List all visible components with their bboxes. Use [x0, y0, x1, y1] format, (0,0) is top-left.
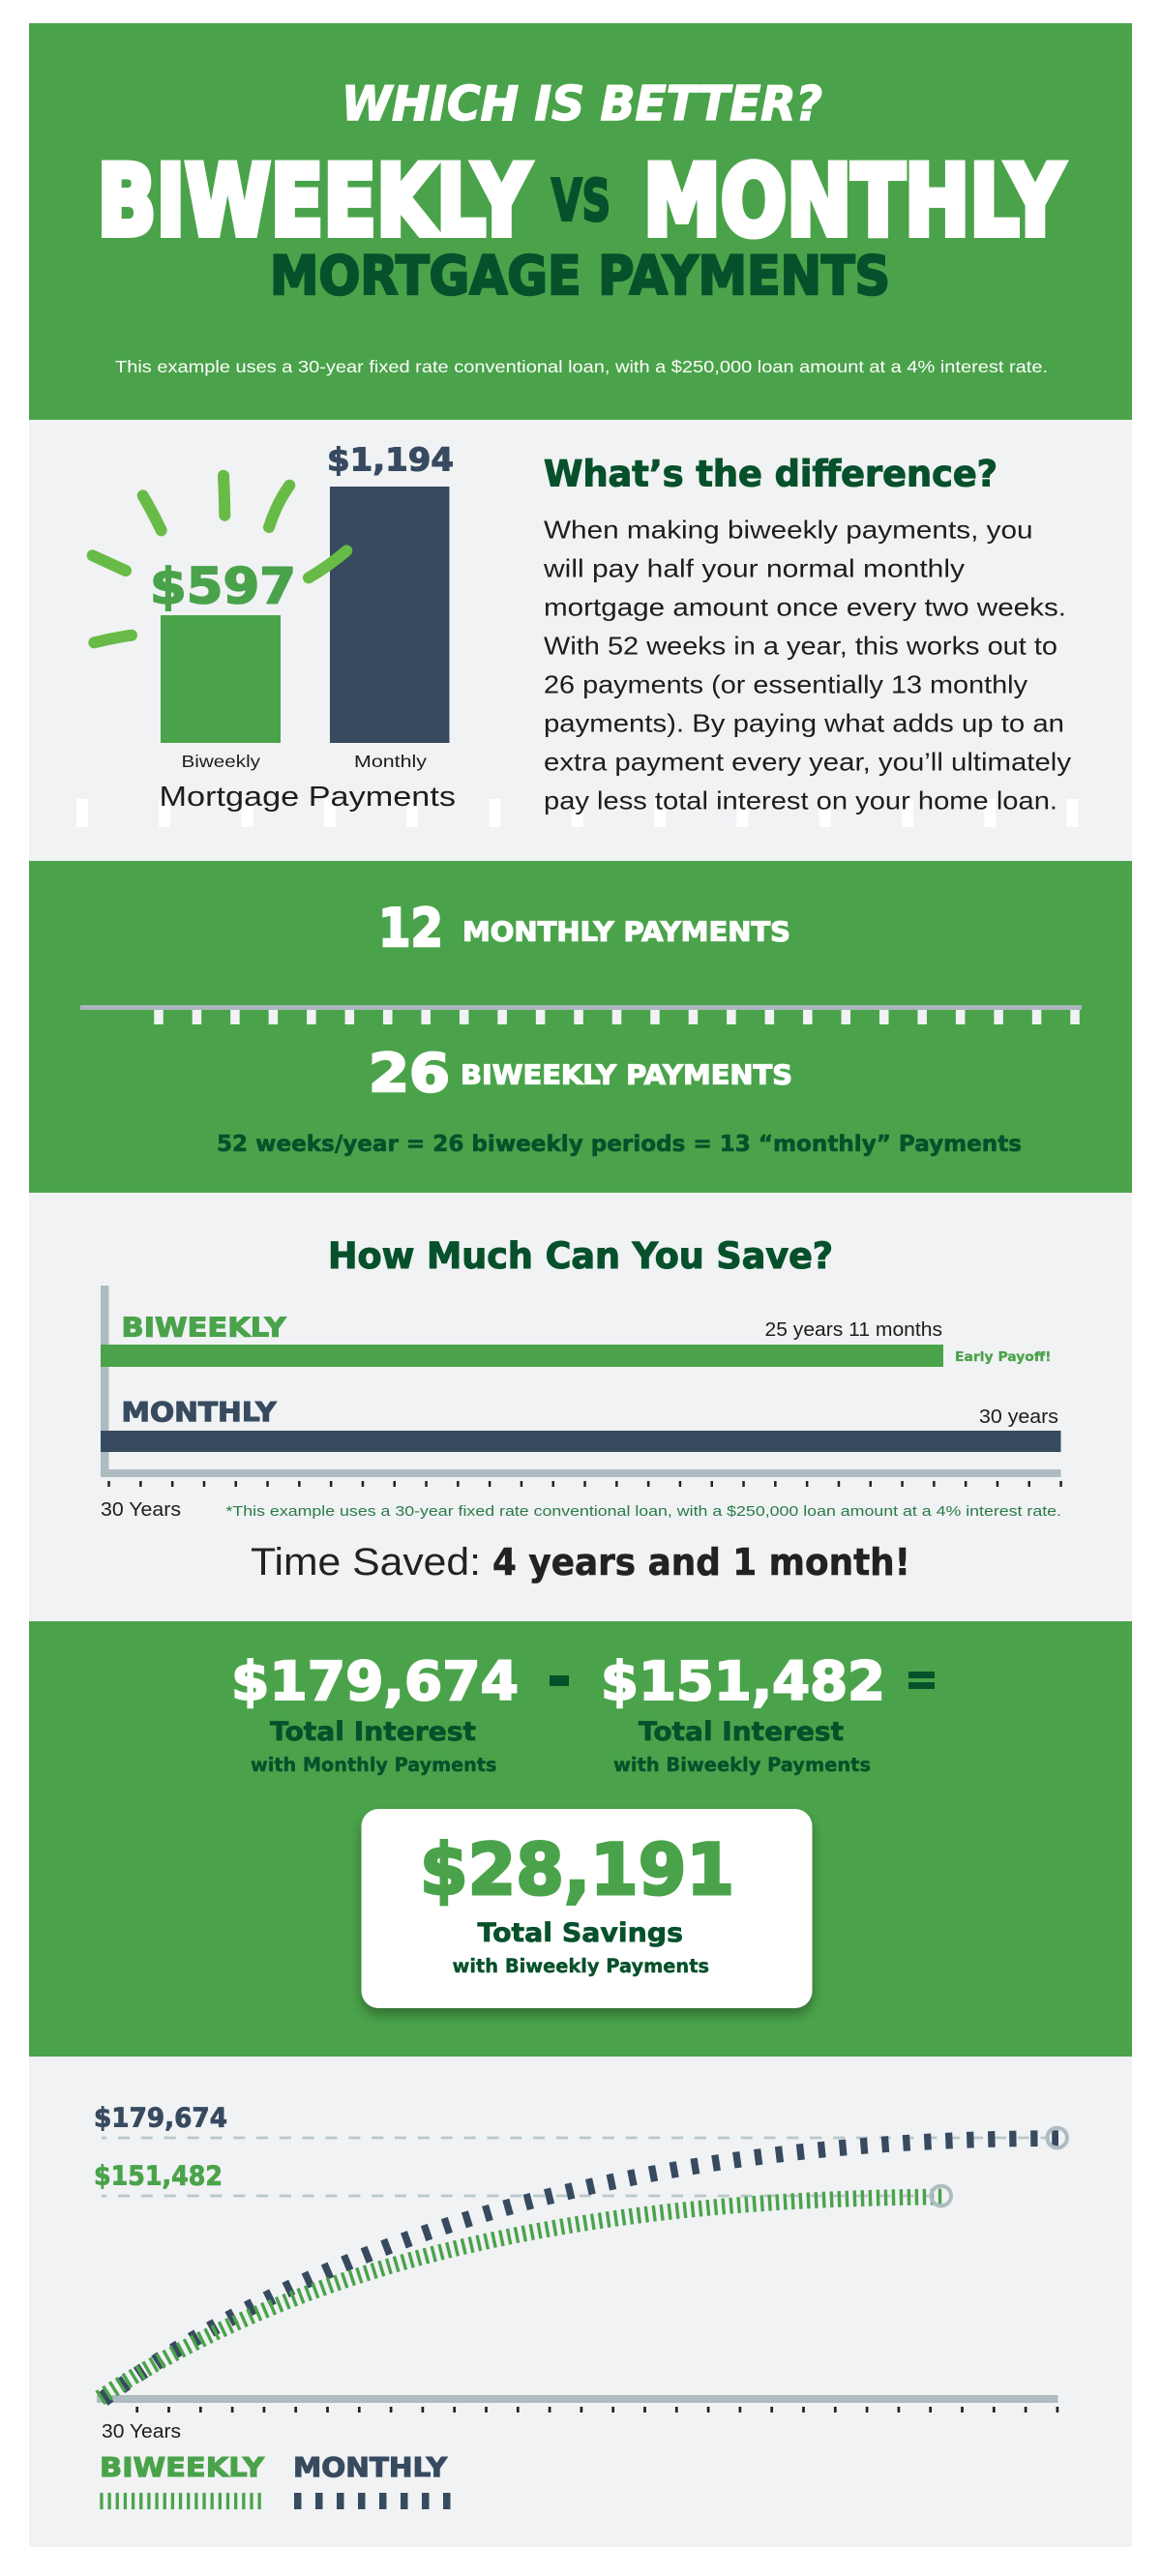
result: time saved: 4 years and 1 month! [492, 1541, 910, 1584]
value: 25 years 11 months: 25 years 11 months [764, 1319, 942, 1341]
equation: 52 weeks/year = 26 biweekly periods = 13 “monthly” Payments [217, 1130, 1022, 1157]
line chart: cumulative interest [94, 2103, 1067, 2443]
label: biweekly: BIWEEKLY [122, 1312, 286, 1343]
bar: biweekly [161, 615, 281, 743]
axis title: mortgage payments: Mortgage Payments [159, 782, 456, 813]
callout: early payoff: Early Payoff! [955, 1349, 1051, 1365]
value: monthly: $1,194 [327, 441, 454, 478]
label: biweekly payments: BIWEEKLY PAYMENTS [461, 1058, 792, 1091]
curve: monthly [101, 2139, 1058, 2401]
value: savings: $28,191 [420, 1829, 734, 1911]
symbol: minus [550, 1675, 569, 1686]
panel: header [29, 23, 1132, 420]
subtitle: mortgage payments: MORTGAGE PAYMENTS [270, 245, 890, 307]
value: monthly total: $179,674 [94, 2103, 227, 2134]
result: time saved [251, 1541, 910, 1584]
axis label: 30 years: 30 Years [102, 2421, 181, 2443]
marker: biweekly end [931, 2186, 951, 2206]
value: biweekly interest: $151,482 [601, 1650, 885, 1712]
axis [97, 2395, 1058, 2403]
sublabel: with monthly payments: with Monthly Payments [251, 1754, 497, 1776]
legend label: monthly: MONTHLY [293, 2451, 448, 2483]
label: biweekly: Biweekly [182, 752, 260, 771]
panel: how much can you save [29, 1193, 1132, 1621]
value: biweekly: $597 [150, 559, 296, 615]
panel: total interest [29, 1621, 1132, 2057]
text block: explanation: will pay half your normal monthly [543, 553, 965, 582]
timeline with ticks [80, 1005, 1082, 1018]
value: monthly interest: $179,674 [231, 1650, 519, 1712]
text block: explanation: 26 payments (or essentially 13 monthly [544, 669, 1027, 698]
heading: how much can you save: How Much Can You Save? [328, 1235, 833, 1277]
sublabel: with biweekly payments: with Biweekly Payments [453, 1955, 709, 1977]
marker: monthly end [1047, 2128, 1067, 2147]
label: monthly: MONTHLY [122, 1396, 277, 1428]
title: biweekly: BIWEEKLY [97, 143, 531, 257]
text block: explanation: pay less total interest on your home loan. [544, 785, 1057, 814]
bar chart: mortgage payments [93, 441, 456, 813]
legend swatch: biweekly [100, 2493, 265, 2509]
text block: explanation: With 52 weeks in a year, this works out to [544, 631, 1057, 660]
text block: explanation: payments). By paying what adds up to an [544, 708, 1064, 737]
title: vs: VS [551, 166, 610, 234]
number: 12: 12 [378, 898, 443, 959]
text block: explanation: When making biweekly payments, you [544, 515, 1033, 544]
label: total interest monthly: Total Interest [270, 1717, 476, 1747]
legend [100, 2451, 451, 2502]
legend label: biweekly: BIWEEKLY [100, 2451, 265, 2483]
symbol: equals [908, 1672, 935, 1689]
axis label: 30 years: 30 Years [101, 1499, 181, 1521]
note: loan example: This example uses a 30-year fixed rate conventional loan, with a $250,000 loan amount at a 4% interest rate. [115, 357, 1048, 376]
chart: loan term bars [101, 1286, 1062, 1521]
panel: what's the difference [29, 420, 1132, 861]
panel: payment counts [29, 861, 1132, 1193]
card: total savings [362, 1809, 813, 2008]
text block: explanation: extra payment every year, you’ll ultimately [544, 747, 1071, 776]
label: monthly payments: MONTHLY PAYMENTS [462, 915, 790, 948]
heading: what's the difference: What’s the difference? [544, 453, 997, 495]
label: monthly: Monthly [354, 752, 427, 771]
bar: biweekly [101, 1345, 943, 1367]
value: 30 years: 30 years [979, 1406, 1058, 1428]
label: total interest biweekly: Total Interest [639, 1717, 844, 1747]
bar: monthly [330, 487, 449, 743]
panel: interest curves [29, 2057, 1132, 2547]
value: biweekly total: $151,482 [94, 2161, 223, 2192]
legend swatch: monthly [294, 2493, 451, 2509]
text block: explanation [543, 515, 1071, 814]
sublabel: with biweekly payments: with Biweekly Payments [613, 1754, 871, 1776]
title: monthly: MONTHLY [643, 143, 1064, 257]
number: 26: 26 [369, 1043, 450, 1104]
icon: burst rays [93, 476, 346, 642]
footnote: *This example uses a 30-year fixed rate conventional loan, with a $250,000 loan amount at a 4% interest rate. [226, 1503, 1061, 1520]
bar: monthly [101, 1431, 1060, 1452]
heading: which is better: WHICH IS BETTER? [342, 76, 822, 132]
label: total savings: Total Savings [478, 1918, 683, 1948]
curve: biweekly [100, 2197, 943, 2398]
result: time saved: Time Saved: [251, 1541, 481, 1584]
text block: explanation: mortgage amount once every two weeks. [544, 592, 1066, 621]
